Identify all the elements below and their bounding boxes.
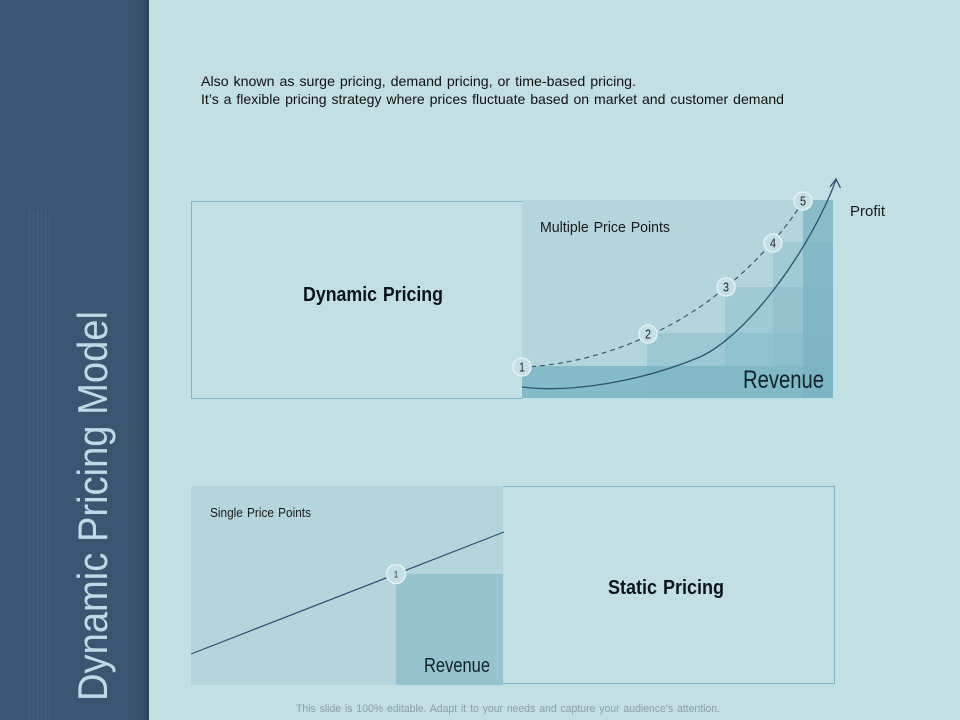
price line [191, 532, 504, 654]
label: multiple price points: Multiple Price Points [540, 219, 670, 236]
stepped revenue bars [522, 200, 833, 398]
intro text [201, 73, 784, 107]
price point 3 [717, 278, 735, 296]
price point 1: 1 [519, 360, 525, 374]
panel: single price points chart [191, 486, 504, 685]
footer note: This slide is 100% editable. Adapt it to your needs and capture your audience's attention. [296, 703, 720, 715]
label: revenue: Revenue [424, 655, 490, 677]
price point 2: 2 [645, 326, 651, 342]
heading: dynamic pricing: Dynamic Pricing [303, 284, 443, 306]
heading: static pricing: Static Pricing [608, 577, 724, 599]
price point 5: 5 [800, 194, 806, 208]
price point 1 [386, 564, 406, 584]
price point 4: 4 [770, 236, 776, 250]
panel: multiple price points chart [513, 179, 840, 398]
label: profit: Profit [850, 203, 886, 220]
panel: static pricing label box [502, 486, 834, 684]
price point 4 [764, 234, 782, 252]
profit curve arrow [522, 179, 840, 389]
price point 1 [513, 358, 531, 376]
label: revenue: Revenue [743, 366, 824, 394]
revenue block [396, 574, 503, 685]
price point 5 [794, 192, 812, 210]
title: Dynamic Pricing Model [69, 311, 116, 701]
price point 3: 3 [723, 280, 729, 294]
dashed price curve [522, 201, 803, 367]
price point 1: 1 [393, 570, 399, 580]
intro text: It’s a flexible pricing strategy where prices fluctuate based on market and customer demand [201, 91, 784, 107]
label: single price points: Single Price Points [210, 505, 311, 520]
intro text: Also known as surge pricing, demand pricing, or time-based pricing. [201, 73, 636, 89]
price point 2 [639, 325, 657, 343]
sidebar [0, 0, 149, 720]
panel: dynamic pricing label box [192, 202, 522, 398]
